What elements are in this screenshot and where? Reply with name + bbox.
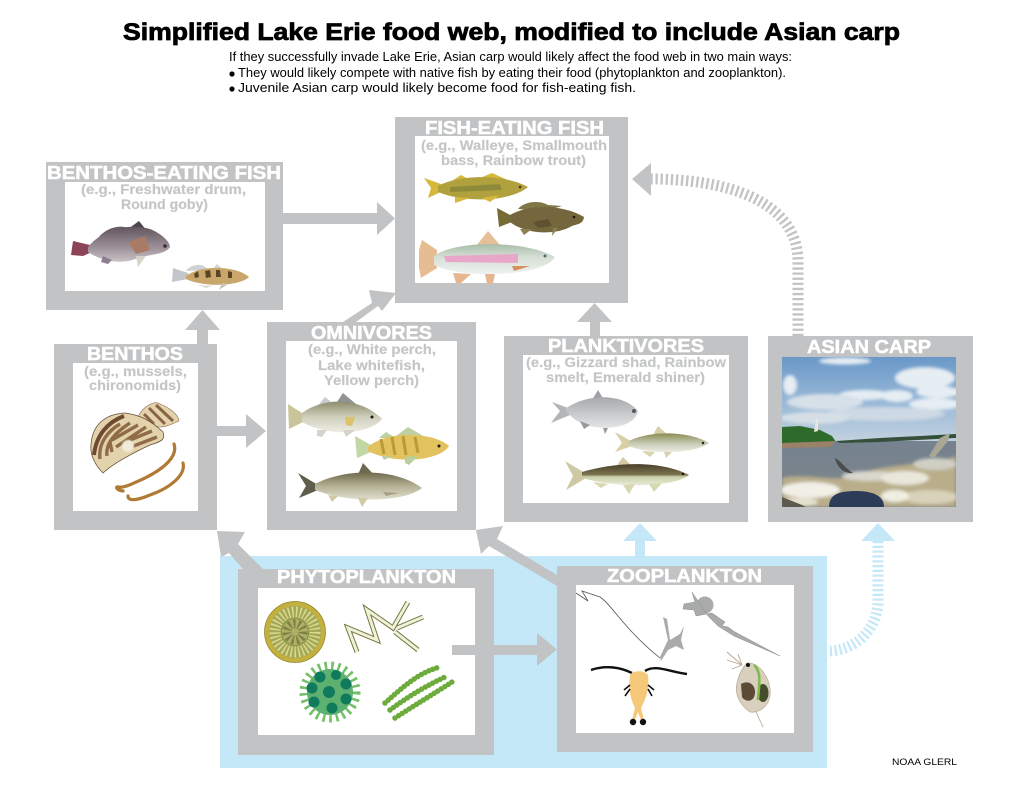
arrow: Asian carp to fish-eating fish (dashed) (632, 163, 798, 336)
arrow: zooplankton to omnivores (476, 526, 557, 586)
arrow: planktivores to fish-eating fish (577, 303, 612, 336)
heading: fish-eating fish: FISH-EATING FISH (425, 117, 604, 138)
intro text: Juvenile Asian carp would likely become food for fish-eating fish. (238, 81, 636, 95)
heading: omnivores: OMNIVORES (311, 322, 432, 343)
examples: fish-eating fish: (e.g., Walleye, Smallmouth (421, 138, 607, 153)
panel: benthos (54, 343, 217, 530)
panel: omnivores (267, 322, 476, 530)
examples: benthos-eating fish (81, 182, 246, 212)
icon: filamentous algae (385, 667, 452, 718)
heading: zooplankton: ZOOPLANKTON (607, 565, 762, 586)
arrow: benthos-eating fish to fish-eating fish (283, 202, 395, 235)
fish: walleye (424, 173, 528, 203)
fish: smallmouth bass (497, 202, 584, 236)
heading: Asian carp: ASIAN CARP (807, 336, 931, 357)
arrow: omnivores to fish-eating fish (343, 290, 396, 322)
arrow: phytoplankton to zooplankton (452, 633, 557, 666)
icon: chironomid larvae (117, 444, 183, 500)
heading: planktivores: PLANKTIVORES (548, 335, 704, 356)
fish: freshwater drum (71, 221, 170, 267)
icon: daphnia (727, 652, 770, 727)
panel: zooplankton (557, 565, 813, 752)
icon: round diatom (264, 602, 326, 662)
examples: benthos-eating fish: Round goby) (121, 197, 208, 212)
fish: rainbow trout (419, 231, 555, 284)
title: Simplified Lake Erie food web, modified to include Asian carp (123, 19, 900, 46)
panel: fish-eating fish (395, 117, 628, 303)
heading: phytoplankton: PHYTOPLANKTON (277, 566, 456, 587)
examples: omnivores: Lake whitefish, (318, 358, 425, 373)
icon: fishhook water flea (683, 592, 780, 656)
examples: omnivores: Yellow perch) (324, 373, 419, 388)
fish: white perch (288, 393, 382, 437)
examples: omnivores: (e.g., White perch, (308, 342, 436, 357)
examples: benthos (84, 364, 187, 393)
examples: planktivores (526, 355, 727, 385)
examples: benthos: (e.g., mussels, (84, 364, 187, 379)
examples: benthos: chironomids) (89, 378, 181, 393)
arrow: phytoplankton to benthos (217, 531, 263, 569)
examples: omnivores (308, 342, 436, 388)
icon: spiny green algae colony (304, 666, 356, 718)
heading: benthos-eating fish: BENTHOS-EATING FISH (47, 162, 281, 183)
credit: NOAA GLERL (892, 757, 957, 768)
panel: benthos-eating fish (46, 162, 283, 310)
icon: zebra mussels (91, 403, 179, 473)
fish: round goby (172, 264, 249, 290)
panel: Asian carp (768, 336, 973, 522)
panel: planktivores (504, 335, 748, 522)
examples: planktivores: smelt, Emerald shiner) (546, 370, 705, 385)
panel: phytoplankton (238, 566, 557, 755)
examples: benthos-eating fish: (e.g., Freshwater drum, (81, 182, 246, 197)
examples: planktivores: (e.g., Gizzard shad, Rainbow (526, 355, 727, 370)
heading: benthos: BENTHOS (87, 343, 183, 364)
fish: emerald shiner (615, 426, 709, 458)
panel: blue plankton background (220, 556, 827, 768)
examples: fish-eating fish: bass, Rainbow trout) (441, 153, 586, 168)
fish: yellow perch (355, 427, 449, 465)
fish: gizzard shad (551, 390, 638, 434)
fish: rainbow smelt (565, 457, 689, 494)
arrow: benthos to benthos-eating fish (185, 310, 220, 344)
examples: fish-eating fish (421, 138, 607, 168)
intro text: They would likely compete with native fish by eating their food (phytoplankton and zooplankton). (238, 66, 786, 80)
arrow: zooplankton to planktivores (623, 523, 657, 556)
fish: lake whitefish (298, 463, 422, 507)
icon: zigzag diatom chain (348, 602, 423, 652)
arrow: zooplankton to Asian carp (dashed) (828, 523, 895, 651)
photo: leaping Asian carp (780, 357, 961, 507)
arrow: benthos to omnivores (217, 414, 266, 448)
intro text: If they successfully invade Lake Erie, Asian carp would likely affect the food web in two main ways: (229, 50, 792, 64)
icon: copepod (591, 667, 687, 725)
intro text (229, 50, 792, 95)
icon: spiny water flea (576, 591, 684, 661)
